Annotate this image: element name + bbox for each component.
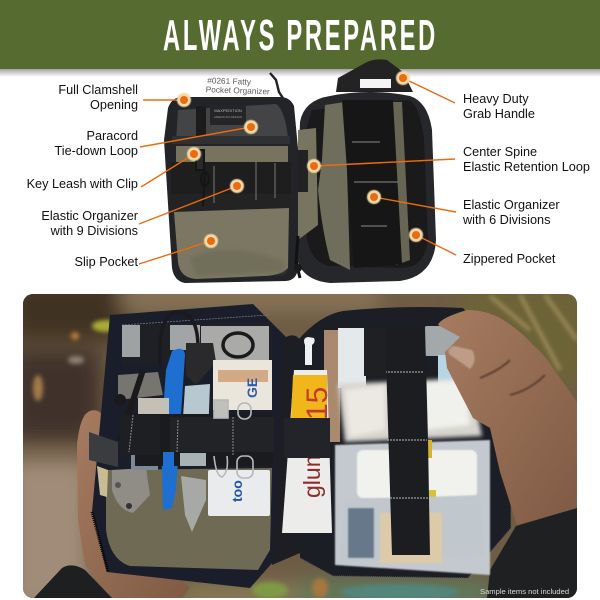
header band (0, 0, 600, 77)
lotion tube: 15 (301, 387, 334, 420)
gauze label (338, 328, 366, 388)
paracord pull (270, 73, 292, 112)
small items (138, 398, 169, 414)
right labels: Elastic Organizer (463, 198, 560, 212)
blue tool (161, 349, 185, 510)
photo panel (10, 280, 590, 600)
vial (183, 384, 210, 414)
left labels: with 9 Divisions (50, 224, 138, 238)
lotion tube (282, 337, 334, 533)
right panel (294, 92, 436, 283)
elastic band (120, 414, 274, 466)
product: open pouch (164, 59, 436, 283)
right labels: Grab Handle (463, 107, 535, 121)
right labels: with 6 Divisions (462, 213, 550, 227)
top gauze roll (338, 378, 482, 442)
tool box (208, 470, 270, 516)
silver tube (424, 326, 462, 356)
callout dots (177, 71, 423, 248)
left labels: Opening (90, 98, 138, 112)
left labels: Key Leash with Clip (27, 177, 138, 191)
spine (272, 335, 300, 565)
maker text: Pocket Organizer (206, 84, 270, 96)
tool box: too (229, 480, 245, 502)
key leash clip (196, 150, 209, 206)
left hand (77, 410, 190, 598)
right sleeve (487, 508, 577, 598)
left labels: Slip Pocket (75, 255, 138, 269)
left sleeve (34, 565, 112, 598)
right organizer panel (298, 307, 511, 578)
maker text (206, 75, 271, 96)
scissors (160, 312, 253, 365)
lower packet (340, 495, 484, 563)
lotion tube: glum (299, 448, 325, 498)
left panel: AMERICAN DESIGN (214, 115, 242, 119)
bandage box: GE (244, 378, 260, 398)
blue label (438, 355, 454, 383)
right labels (462, 92, 590, 266)
bandage box (213, 360, 272, 410)
left labels (27, 83, 139, 269)
blurred background (10, 280, 590, 600)
left panel: MAXPEDITION (214, 108, 242, 113)
left panel (164, 75, 300, 283)
callout lines (139, 78, 456, 264)
multitool (112, 372, 163, 513)
left labels: Paracord (87, 129, 138, 143)
right labels: Heavy Duty (463, 92, 529, 106)
right labels: Elastic Retention Loop (463, 160, 590, 174)
safety pin and clips (214, 400, 253, 478)
blue tool lower and vial lower (163, 452, 174, 466)
key leash (89, 370, 143, 497)
vertical elastic band (385, 327, 430, 555)
second gauze roll (335, 440, 490, 575)
khaki slip pocket (106, 468, 272, 570)
left labels: Full Clamshell (58, 83, 138, 97)
right labels: Center Spine (463, 145, 537, 159)
grab handle (336, 59, 413, 92)
sample note: Sample items not included (480, 587, 569, 596)
right hand (438, 310, 577, 525)
reflective inner pocket (125, 324, 135, 325)
right labels: Zippered Pocket (463, 252, 556, 266)
left organizer panel (89, 304, 287, 588)
left labels: Elastic Organizer (41, 209, 139, 223)
maker text: #0261 Fatty (207, 75, 252, 87)
flashlight (186, 343, 216, 385)
kraft packet (324, 330, 340, 442)
left labels: Tie-down Loop (55, 144, 138, 158)
